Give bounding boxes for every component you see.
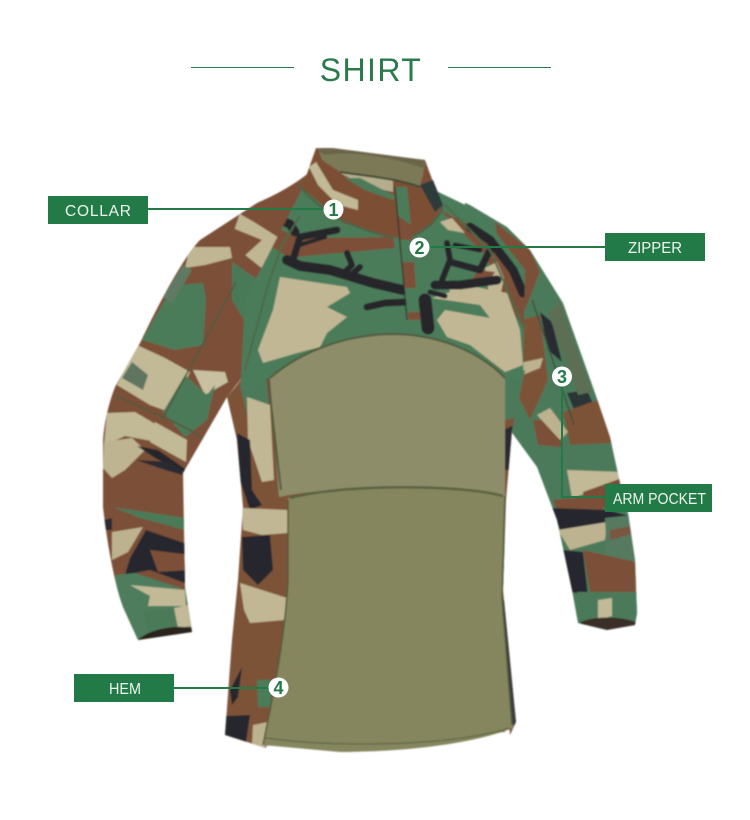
callout 1: collar: 1 [328, 200, 339, 220]
velcro patch: mid arm [122, 362, 148, 390]
collar [300, 148, 443, 238]
callout 1: collar: COLLAR [65, 203, 131, 220]
title: SHIRT with flanking rules: SHIRT [320, 52, 422, 88]
mesh lower panel [263, 487, 513, 752]
callout 3: arm pocket: ARM POCKET [613, 491, 706, 508]
callout 1: collar [48, 196, 344, 224]
raglan seams [245, 205, 525, 370]
zipper placket [395, 187, 420, 320]
callout 2: zipper [410, 233, 705, 261]
right side panel [502, 370, 526, 736]
left sleeve [102, 174, 308, 641]
callout 4: hem: 4 [273, 678, 284, 698]
shirt illustration [95, 148, 645, 752]
olive upper chest panel [268, 334, 505, 497]
left side panel [224, 380, 288, 749]
callout 3: arm pocket: 3 [557, 367, 567, 387]
cuff strap [143, 606, 192, 638]
sleeve pocket outline [116, 282, 236, 440]
velcro patch: upper arm [163, 265, 192, 303]
velcro patch: arm pocket [548, 302, 592, 395]
chest camouflage [240, 190, 526, 390]
callout 2: zipper: ZIPPER [628, 240, 682, 257]
callout 3: arm pocket [552, 366, 712, 512]
callout 2: zipper: 2 [414, 238, 425, 258]
callout 4: hem [74, 674, 288, 702]
right sleeve [465, 180, 645, 640]
torso base [226, 320, 512, 746]
callout 4: hem: HEM [109, 681, 141, 698]
camouflage yoke and collar [230, 148, 530, 390]
